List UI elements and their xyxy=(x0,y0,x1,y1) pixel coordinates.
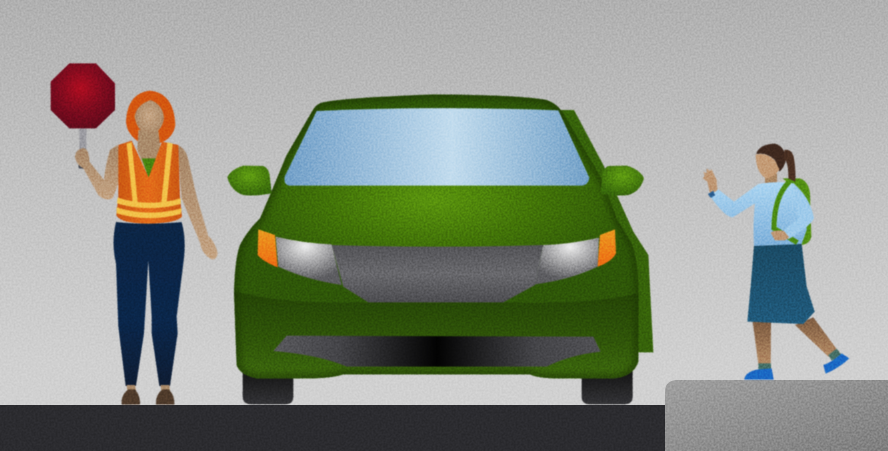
right mirror xyxy=(601,166,644,196)
car xyxy=(227,94,653,404)
right arm and hand xyxy=(177,145,218,259)
left arm and hand xyxy=(75,145,123,199)
green shirt xyxy=(142,158,156,178)
vest xyxy=(116,141,182,224)
trousers xyxy=(113,222,185,386)
crossing guard xyxy=(51,63,218,405)
hair xyxy=(756,144,786,172)
socks xyxy=(758,349,842,371)
left mirror xyxy=(227,166,272,196)
stop paddle xyxy=(51,63,115,169)
sweater xyxy=(710,182,807,246)
ponytail xyxy=(784,150,796,182)
rear wheels xyxy=(243,368,633,404)
left turn signal xyxy=(258,229,278,267)
skirt xyxy=(747,244,815,324)
hand on strap xyxy=(771,230,789,240)
car body xyxy=(234,94,639,378)
left headlight xyxy=(276,237,342,285)
backpack strap xyxy=(774,182,797,243)
face xyxy=(756,154,779,179)
grille xyxy=(332,245,543,302)
windshield xyxy=(284,108,589,186)
legs xyxy=(753,317,837,364)
cuff xyxy=(708,191,715,198)
neck xyxy=(765,173,777,185)
backpack xyxy=(783,178,811,245)
raised hand xyxy=(703,169,717,193)
right turn signal xyxy=(598,229,616,267)
student xyxy=(703,144,849,380)
road xyxy=(0,405,666,451)
lower vent xyxy=(273,336,601,367)
hair xyxy=(126,91,175,143)
curb xyxy=(665,380,888,451)
front bumper xyxy=(234,291,639,378)
far side of car xyxy=(558,110,653,352)
face xyxy=(135,100,164,135)
neck xyxy=(137,130,161,178)
vest stripes xyxy=(117,142,182,218)
bent arm xyxy=(784,183,814,239)
shoes xyxy=(744,353,849,380)
shoes xyxy=(122,385,174,405)
right headlight xyxy=(535,238,599,284)
body edge shading xyxy=(234,94,639,378)
